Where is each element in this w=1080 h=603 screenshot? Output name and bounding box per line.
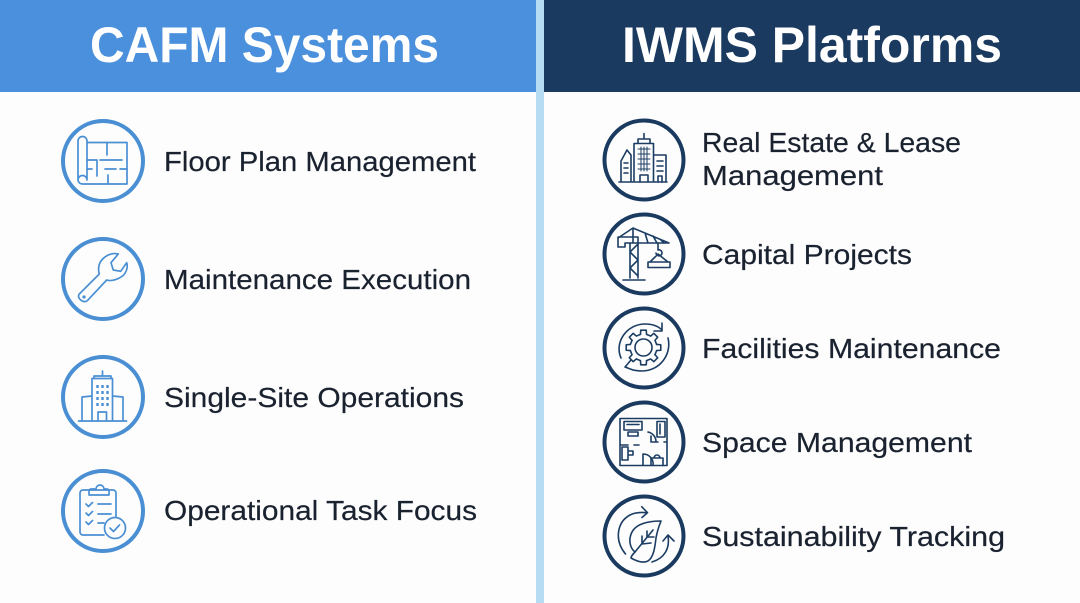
icon: office building <box>63 357 143 437</box>
item: floor plan management <box>63 121 476 201</box>
panel: IWMS items <box>604 120 1005 576</box>
right column header: IWMS Platforms: IWMS Platforms <box>622 17 1002 73</box>
item: facilities maintenance <box>604 308 1001 388</box>
icon: tower crane <box>604 214 684 294</box>
label: Floor Plan Management <box>164 146 476 177</box>
label: Facilities Maintenance <box>702 333 1001 364</box>
item: real estate and lease management: Management <box>702 160 883 191</box>
left column header: CAFM Systems <box>0 0 536 92</box>
label: Maintenance Execution <box>164 264 471 295</box>
icon: gear with rotating arrows <box>604 308 684 388</box>
item: sustainability tracking <box>604 496 1005 576</box>
item: capital projects <box>604 214 912 294</box>
icon: leaf with circular arrows <box>604 496 684 576</box>
icon: clipboard with checkmark <box>63 471 143 551</box>
icon: city buildings <box>604 120 684 200</box>
icon: furnished floor plan <box>604 402 684 482</box>
left column header: CAFM Systems: CAFM Systems <box>90 17 439 73</box>
item: operational task focus <box>63 471 477 551</box>
center divider <box>536 0 544 603</box>
label: Space Management <box>702 427 972 458</box>
label: Real Estate & Lease <box>702 127 961 158</box>
label: Sustainability Tracking <box>702 521 1005 552</box>
label: Capital Projects <box>702 239 912 270</box>
panel: CAFM items <box>63 121 477 551</box>
label: Single-Site Operations <box>164 382 464 413</box>
item: maintenance execution <box>63 239 471 319</box>
icon: wrench <box>63 239 143 319</box>
item: single-site operations <box>63 357 464 437</box>
item: real estate and lease management <box>604 120 961 200</box>
icon: floor plan <box>63 121 143 201</box>
label: Operational Task Focus <box>164 495 477 526</box>
right column header: IWMS Platforms <box>544 0 1080 92</box>
item: space management <box>604 402 972 482</box>
